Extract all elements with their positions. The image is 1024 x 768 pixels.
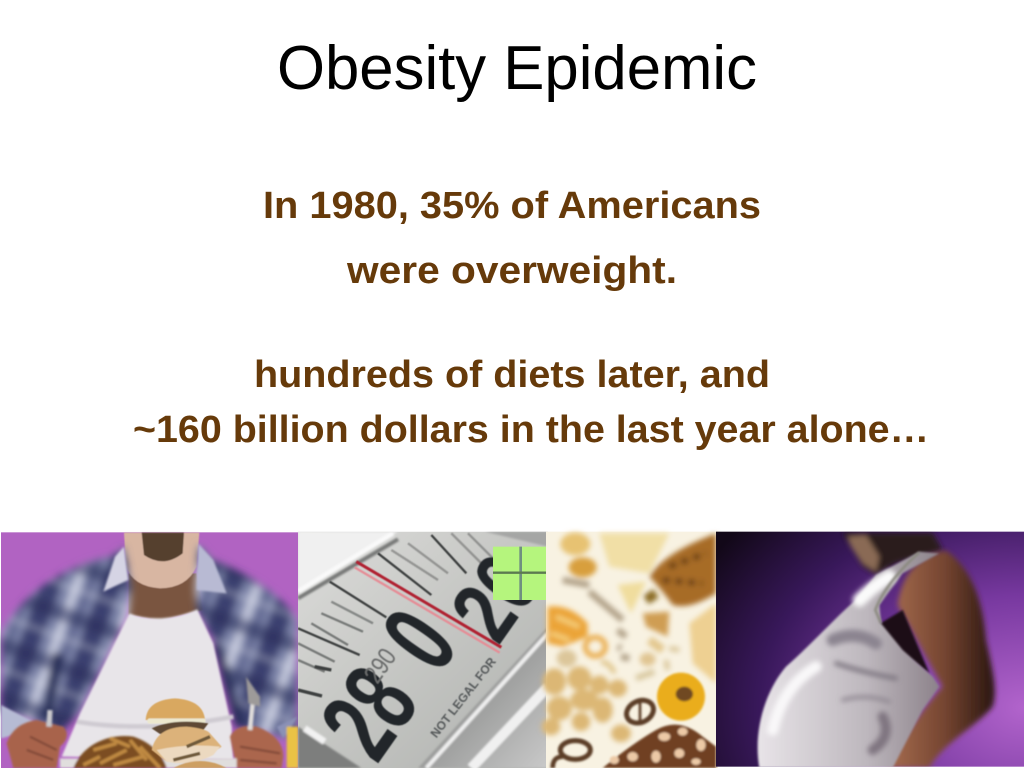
text: 1980 statistic: In 1980, 35% of Americans (263, 185, 761, 227)
vest trim (875, 553, 919, 623)
scale numbers: 290 (358, 643, 402, 688)
scale numbers: 0 (361, 590, 480, 690)
text: diets and spending: ~160 billion dollars in the last year alone… (133, 409, 929, 451)
tan pasta right (689, 603, 716, 683)
vest (758, 552, 939, 768)
plate (60, 758, 237, 768)
text: 1980 statistic: were overweight. (346, 250, 677, 292)
yellow background item (287, 727, 298, 768)
photo: man with large belly in profile (716, 532, 1024, 768)
text: diets and spending (133, 354, 929, 451)
head (843, 533, 943, 575)
text: diets and spending: hundreds of diets later, and (254, 354, 770, 396)
brown cereal pile (649, 533, 716, 606)
scale numbers (323, 556, 533, 764)
undershirt (62, 609, 233, 760)
scale numbers: NOT LEGAL FOR (428, 654, 499, 740)
dark armpit (878, 610, 929, 673)
cuffs (1, 705, 33, 738)
bottom metal band (418, 627, 548, 768)
photo: man in plaid shirt with burgers (1, 532, 298, 768)
tan round crackers (542, 666, 631, 742)
burgers (146, 698, 205, 720)
neck (124, 533, 199, 588)
chest (128, 573, 203, 621)
pretzels (560, 696, 657, 759)
scale numbers: 20 (432, 537, 559, 658)
photo: snack foods and pretzels (542, 532, 718, 768)
pale chips (599, 533, 669, 573)
orange ring (657, 673, 705, 721)
text: 1980 statistic (263, 185, 761, 292)
beard (142, 533, 184, 561)
cutlery (41, 710, 58, 727)
grey shells (563, 580, 629, 658)
scale ticks (298, 533, 495, 696)
orange curls (548, 606, 588, 647)
fries (73, 736, 167, 768)
red indicator (355, 562, 501, 653)
photo: weight scale dial (298, 532, 559, 768)
top metal band (298, 532, 398, 592)
vest folds (773, 577, 896, 750)
green squares (493, 547, 548, 600)
shirt (1, 543, 298, 738)
title: Obesity Epidemic (277, 34, 757, 103)
arm (886, 551, 995, 768)
hands (7, 720, 67, 768)
shirt collars (103, 547, 128, 592)
